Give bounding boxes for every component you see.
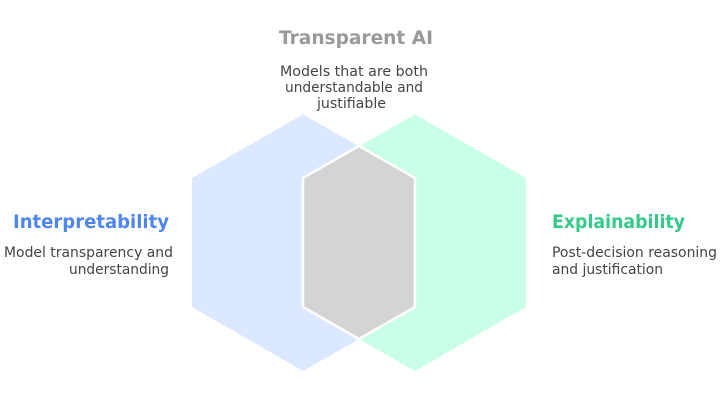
text block: Transparent AI description: justifiable: [316, 96, 386, 112]
hexagon: explainability: [303, 114, 526, 371]
hexagon: intersection: [303, 146, 415, 339]
heading: Explainability: Explainability: [552, 211, 686, 233]
panel: right concept, Explainability: [552, 211, 717, 278]
text block: Transparent AI description: understandable and: [285, 80, 423, 96]
hexagon: interpretability: [192, 114, 415, 371]
panel: left concept, Interpretability: [4, 211, 173, 278]
text block: Explainability description: [552, 245, 717, 278]
text block: Explainability description: and justification: [552, 262, 663, 278]
text block: Transparent AI description: Models that are both: [280, 64, 428, 80]
text block: Interpretability description: understanding: [69, 262, 169, 278]
text block: Interpretability description: Model transparency and: [4, 245, 173, 261]
text block: Interpretability description: [4, 245, 173, 278]
panel: top concept, Transparent AI: [279, 27, 433, 112]
text block: Transparent AI description: [280, 64, 428, 112]
heading: Transparent AI: Transparent AI: [279, 27, 433, 49]
heading: Interpretability: Interpretability: [13, 211, 170, 233]
text block: Explainability description: Post-decision reasoning: [552, 245, 717, 261]
